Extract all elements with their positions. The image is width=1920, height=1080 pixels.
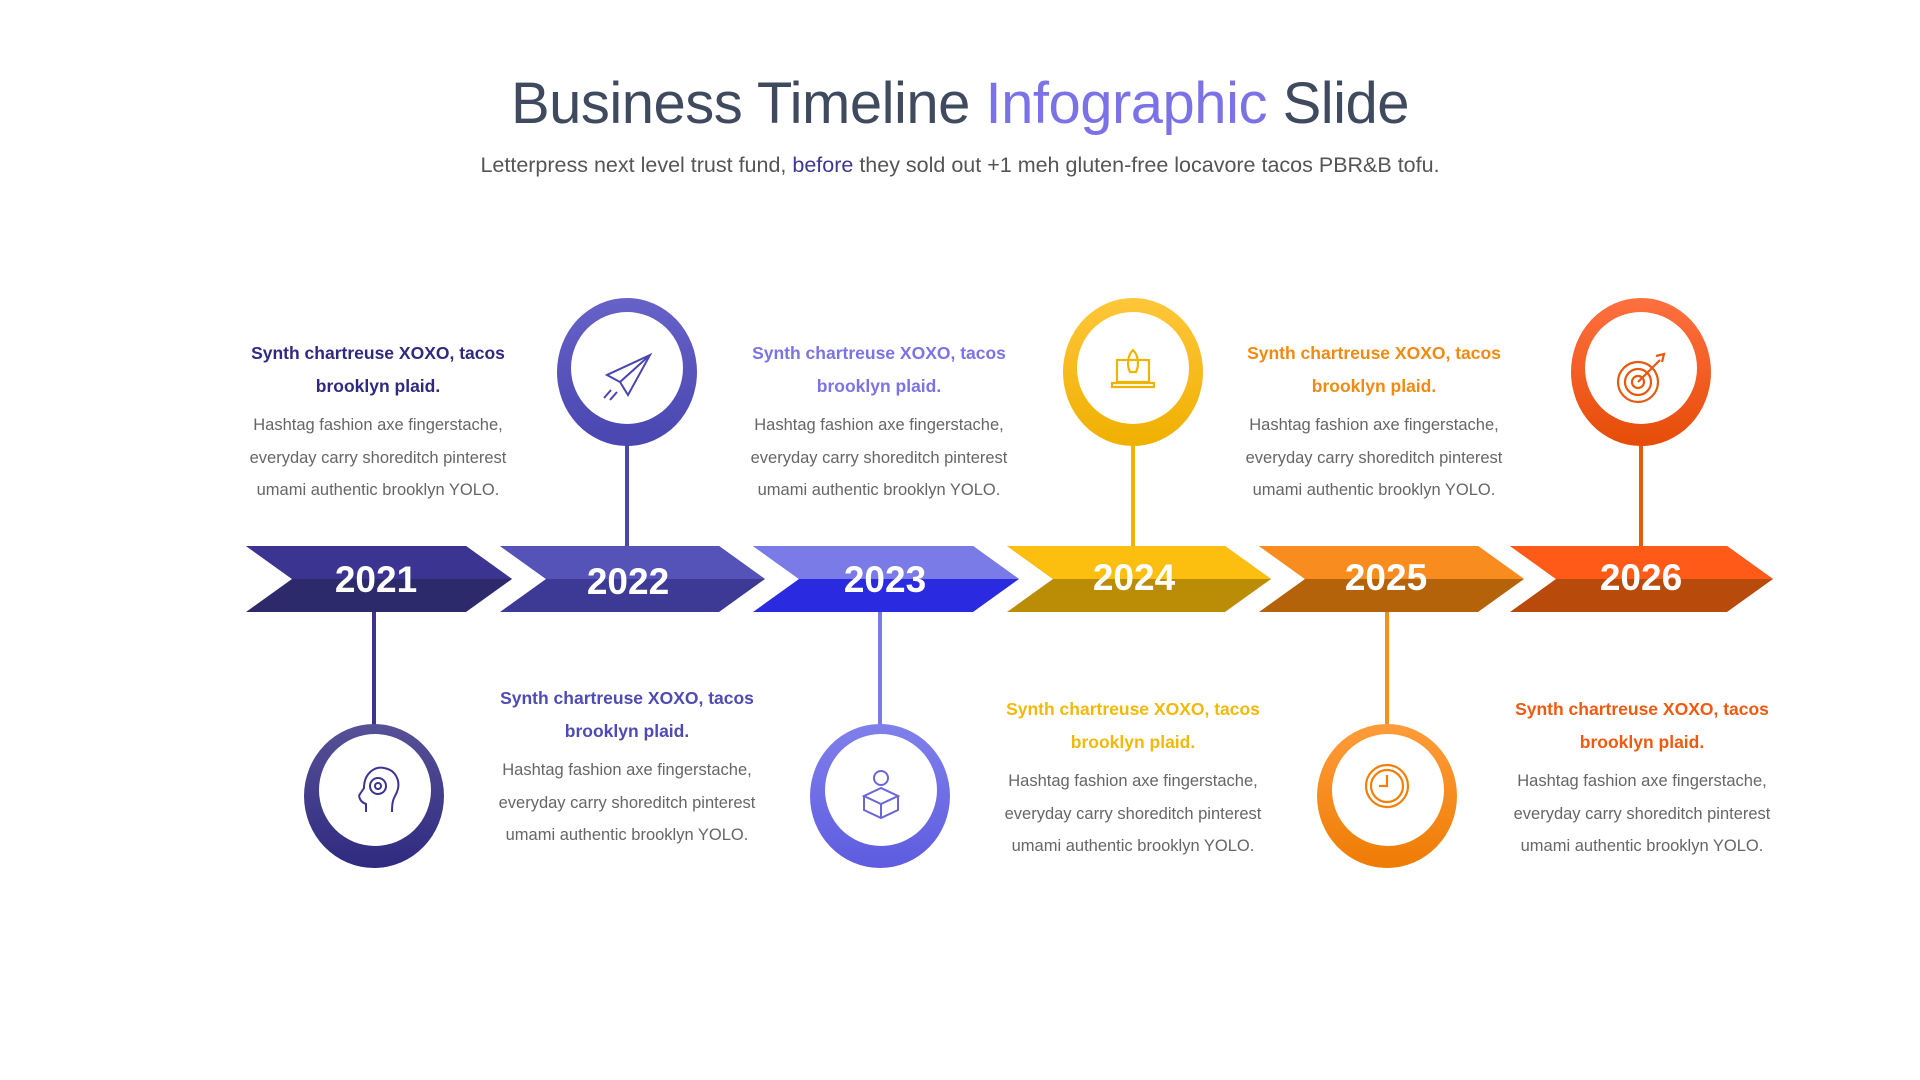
title: Business Timeline Infographic Slide	[511, 71, 1409, 136]
text 2021: Hashtag fashion axe fingerstache,	[253, 416, 503, 434]
text 2026: Synth chartreuse XOXO, tacos	[1515, 699, 1769, 719]
chevron 2021: 2021	[335, 559, 417, 600]
text 2021: umami authentic brooklyn YOLO.	[257, 481, 499, 499]
circle icon: clock 2025	[1317, 724, 1457, 868]
stems	[374, 440, 1641, 726]
text 2022	[499, 688, 756, 844]
text 2024	[1005, 699, 1262, 855]
text 2024: Hashtag fashion axe fingerstache,	[1008, 772, 1258, 790]
chevron 2023: 2023	[844, 559, 926, 600]
text 2025: everyday carry shoreditch pinterest	[1246, 448, 1502, 466]
subtitle: Letterpress next level trust fund, before they sold out +1 meh gluten-free locavore tacos PBR&B tofu.	[480, 153, 1440, 177]
text 2021: Synth chartreuse XOXO, tacos	[251, 343, 505, 363]
circle icon: rocket laptop 2024	[1063, 298, 1203, 446]
text 2023: Hashtag fashion axe fingerstache,	[754, 416, 1004, 434]
text 2022: everyday carry shoreditch pinterest	[499, 794, 755, 812]
text 2025: Hashtag fashion axe fingerstache,	[1249, 416, 1499, 434]
chevron 2021	[246, 546, 512, 612]
text 2025	[1246, 343, 1502, 499]
text 2021	[250, 343, 506, 499]
chevron 2026: 2026	[1600, 557, 1682, 598]
circle icon: target 2026	[1571, 298, 1711, 446]
text 2024: everyday carry shoreditch pinterest	[1005, 804, 1261, 822]
text 2024: umami authentic brooklyn YOLO.	[1012, 837, 1254, 855]
text 2026: umami authentic brooklyn YOLO.	[1521, 837, 1763, 855]
circle icon: head maze 2021	[304, 724, 444, 868]
text 2026: brooklyn plaid.	[1580, 732, 1704, 752]
text 2022: umami authentic brooklyn YOLO.	[506, 826, 748, 844]
chevron 2024: 2024	[1093, 557, 1176, 598]
chevron 2026	[1510, 546, 1773, 612]
text 2021: brooklyn plaid.	[316, 376, 440, 396]
text 2022: Hashtag fashion axe fingerstache,	[502, 761, 752, 779]
chevron 2025	[1259, 546, 1524, 612]
text 2022: brooklyn plaid.	[565, 721, 689, 741]
text 2026: everyday carry shoreditch pinterest	[1514, 804, 1770, 822]
text 2023: umami authentic brooklyn YOLO.	[758, 481, 1000, 499]
text 2026: Hashtag fashion axe fingerstache,	[1517, 772, 1767, 790]
circle icon: idea box 2023	[810, 724, 950, 868]
text 2021: everyday carry shoreditch pinterest	[250, 448, 506, 466]
circle icon: paper plane 2022	[557, 298, 697, 446]
text 2025: brooklyn plaid.	[1312, 376, 1436, 396]
text 2024: Synth chartreuse XOXO, tacos	[1006, 699, 1260, 719]
chevron 2022	[500, 546, 765, 612]
text 2022: Synth chartreuse XOXO, tacos	[500, 688, 754, 708]
text 2023: Synth chartreuse XOXO, tacos	[752, 343, 1006, 363]
chevron 2024	[1007, 546, 1271, 612]
text 2023: everyday carry shoreditch pinterest	[751, 448, 1007, 466]
text 2024: brooklyn plaid.	[1071, 732, 1195, 752]
chevron 2022: 2022	[587, 561, 669, 602]
chevron 2025: 2025	[1345, 557, 1427, 598]
text 2023	[751, 343, 1008, 499]
chevron 2023	[753, 546, 1019, 612]
text 2025: Synth chartreuse XOXO, tacos	[1247, 343, 1501, 363]
text 2023: brooklyn plaid.	[817, 376, 941, 396]
text 2026	[1514, 699, 1770, 855]
text 2025: umami authentic brooklyn YOLO.	[1253, 481, 1495, 499]
